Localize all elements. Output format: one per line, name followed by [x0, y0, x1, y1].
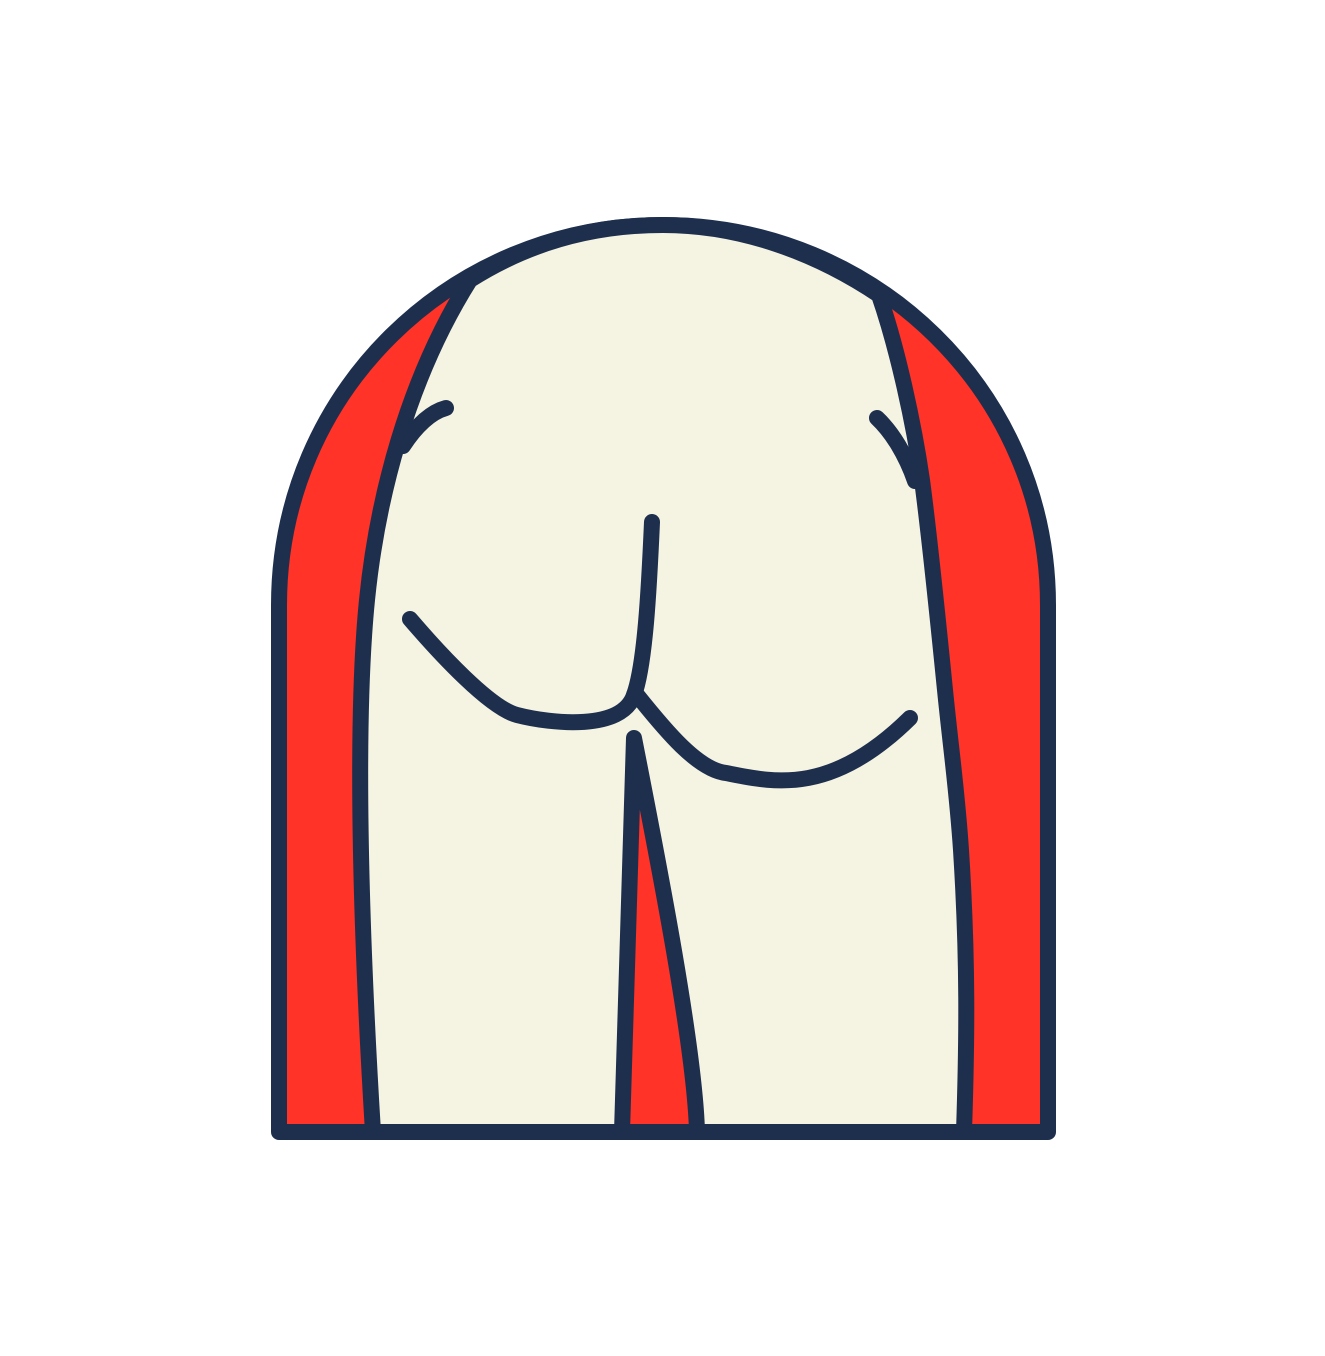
- lower back left crease visible stroke: [403, 408, 446, 446]
- lower back right crease: [877, 418, 915, 481]
- lower back left crease: [409, 408, 446, 438]
- center crease: [634, 522, 652, 695]
- right cheek curve: [637, 695, 910, 780]
- arch: red background: [279, 225, 1048, 1132]
- body: cream silhouette: [360, 225, 966, 1132]
- left cheek curve: [410, 619, 634, 722]
